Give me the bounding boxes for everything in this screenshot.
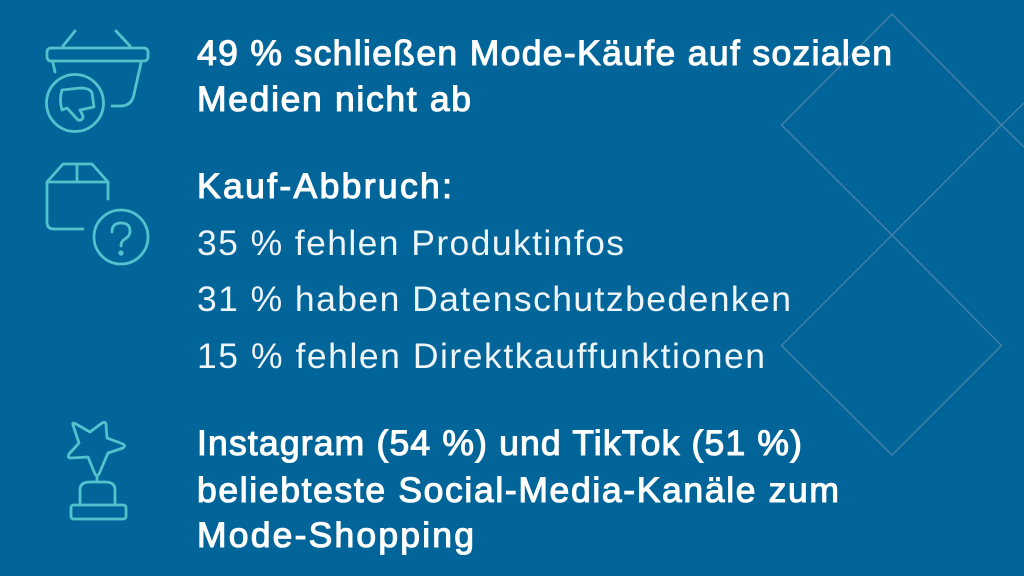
icon: parcel with question mark bbox=[47, 164, 148, 264]
list item: direct purchase functions: 15 % fehlen Direktkauffunktionen bbox=[197, 336, 765, 376]
list item: product info: 35 % fehlen Produktinfos bbox=[197, 223, 624, 263]
text: 49 % abandon purchases: Medien nicht ab bbox=[197, 79, 471, 119]
text: most popular channels: beliebteste Social-Media-Kanäle zum bbox=[197, 470, 839, 510]
list item: privacy concerns: 31 % haben Datenschutzbedenken bbox=[197, 279, 791, 319]
text: 49 % abandon purchases: 49 % schließen Mode-Käufe auf sozialen bbox=[197, 33, 892, 73]
text: most popular channels bbox=[197, 423, 839, 555]
text: 49 % abandon purchases bbox=[197, 33, 892, 119]
icon: star trophy bbox=[68, 422, 126, 519]
text: reasons for abandoning purchase bbox=[197, 166, 791, 376]
subheading: Kauf-Abbruch: Kauf-Abbruch: bbox=[197, 166, 452, 206]
text: most popular channels: Mode-Shopping bbox=[197, 515, 474, 555]
text: most popular channels: Instagram (54 %) und TikTok (51 %) bbox=[197, 423, 802, 463]
icon: shopping basket with thumbs down bbox=[46, 31, 148, 132]
